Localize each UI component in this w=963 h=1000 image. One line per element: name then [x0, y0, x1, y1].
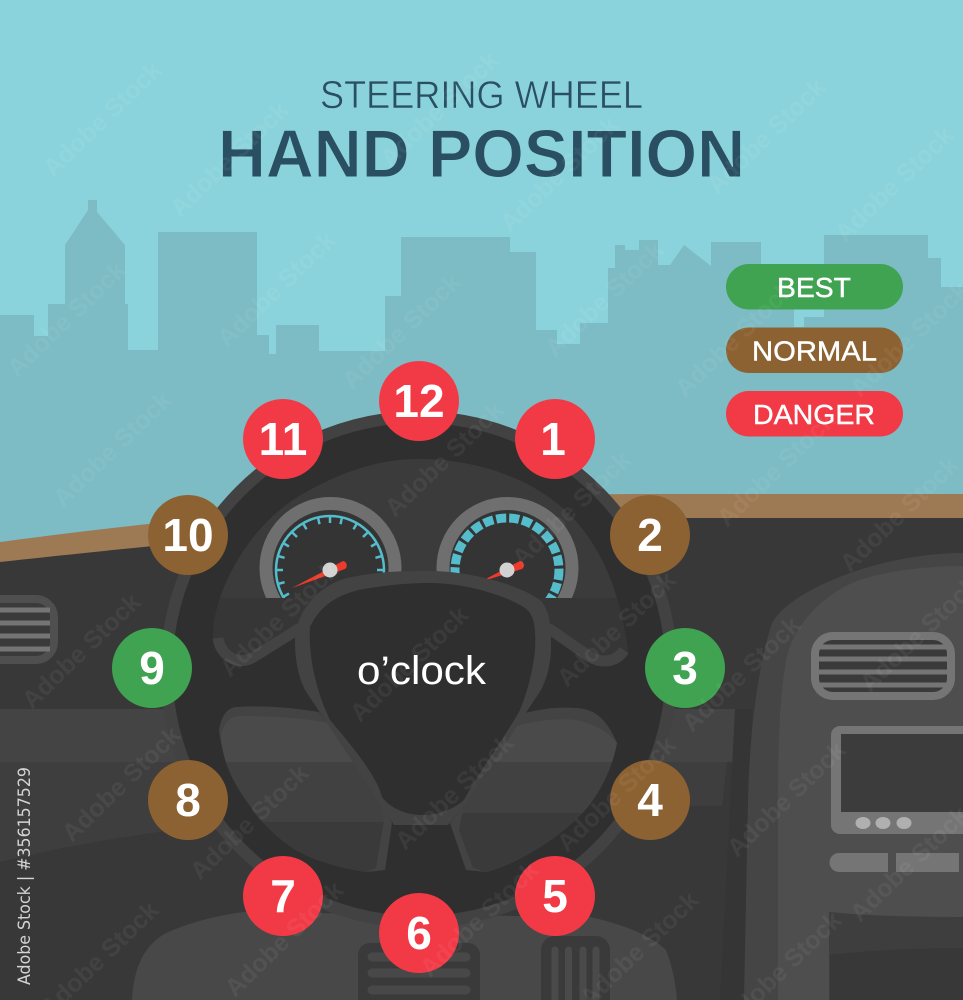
rpm needle [486, 561, 524, 580]
watermarks: Adobe Stock [670, 276, 799, 402]
legend: danger: DANGER [753, 399, 875, 430]
watermarks: Adobe Stock [57, 721, 186, 847]
marker 8 [148, 760, 228, 840]
stock id stamp: Adobe Stock | #356157529 [15, 767, 35, 985]
lower console pocket [830, 948, 963, 1000]
marker 3: 3 [672, 642, 698, 694]
watermarks: Adobe Stock [415, 856, 544, 982]
marker 5 [515, 856, 595, 936]
dashboard top trim [0, 494, 963, 600]
right air vent [815, 636, 951, 696]
watermarks: Adobe Stock [48, 386, 177, 512]
marker 6 [379, 893, 459, 973]
watermarks: Adobe Stock [722, 736, 851, 862]
title line 1: STEERING WHEEL [320, 74, 643, 117]
speed needle [292, 561, 347, 588]
watermarks: Adobe Stock [215, 556, 344, 682]
watermarks: Adobe Stock [165, 96, 294, 222]
watermarks: Adobe Stock [830, 121, 959, 247]
console inner [778, 566, 963, 1000]
wheel upper hub [213, 459, 628, 666]
label: o'clock: o’clock [357, 649, 487, 693]
watermarks: Adobe Stock [677, 611, 806, 737]
marker 8: 8 [175, 774, 201, 826]
steering wheel [166, 417, 672, 922]
marker 7 [243, 856, 323, 936]
marker 9: 9 [139, 642, 165, 694]
legend: best: BEST [777, 272, 851, 303]
watermarks: Adobe Stock [337, 268, 466, 394]
city skyline silhouette [0, 200, 963, 600]
screen buttons [856, 817, 912, 829]
marker 10: 10 [162, 509, 214, 561]
marker 3 [645, 628, 725, 708]
lower console cutout [829, 912, 963, 1000]
marker 2: 2 [637, 509, 663, 561]
watermarks: Adobe Stock [552, 566, 681, 692]
marker 11 [243, 399, 323, 479]
wheel rim [166, 417, 672, 922]
watermarks: Adobe Stock [540, 236, 669, 362]
legend: normal [726, 328, 903, 373]
watermarks: Adobe Stock [38, 56, 167, 182]
dashboard body [0, 518, 963, 1000]
display screen [831, 726, 963, 834]
marker 12: 12 [393, 375, 445, 427]
marker 4 [610, 760, 690, 840]
lower dash hump [132, 912, 677, 1000]
left air vent [0, 599, 54, 660]
watermarks: Adobe Stock [712, 406, 841, 532]
lower center vent [358, 943, 480, 1000]
marker 1 [515, 399, 595, 479]
console buttons [830, 853, 959, 872]
watermarks: Adobe Stock [212, 226, 341, 352]
watermarks: Adobe Stock [552, 731, 681, 857]
left gauge [260, 497, 402, 598]
marker 4: 4 [637, 774, 663, 826]
watermarks: Adobe Stock [380, 396, 509, 522]
right hub lobe [450, 708, 617, 872]
speed scale [274, 514, 386, 598]
watermarks: Adobe Stock [220, 876, 349, 1000]
watermarks: Adobe Stock [390, 729, 519, 855]
title [218, 74, 745, 192]
watermarks: Adobe Stock [507, 446, 636, 572]
watermarks: Adobe Stock [17, 588, 146, 714]
left hub lobe [219, 706, 392, 872]
marker 7: 7 [270, 870, 296, 922]
needle hub [322, 562, 338, 578]
watermarks: Adobe Stock [702, 73, 831, 199]
console outer [744, 553, 963, 1000]
title line 2: HAND POSITION [218, 116, 745, 192]
needle hub [500, 562, 514, 578]
center console [744, 553, 963, 1000]
watermarks: Adobe Stock [495, 111, 624, 237]
clock markers [112, 361, 725, 973]
legend: danger [726, 391, 903, 436]
watermarks: Adobe Stock [375, 46, 504, 172]
watermarks: Adobe Stock [2, 256, 131, 382]
legend: best [726, 264, 903, 310]
marker 11: 11 [259, 413, 307, 465]
marker 1: 1 [540, 413, 566, 465]
marker 2 [610, 495, 690, 575]
legend: normal: NORMAL [752, 336, 877, 366]
watermarks: Adobe Stock [835, 451, 963, 577]
watermarks: Adobe Stock [185, 759, 314, 885]
airbag center [295, 571, 551, 825]
watermarks: Adobe Stock [345, 601, 474, 727]
marker 9 [112, 628, 192, 708]
console shadow [720, 709, 752, 1000]
legend pills [726, 264, 903, 436]
right gauge [436, 497, 578, 598]
segmented scale [450, 514, 564, 598]
lower right vent [541, 936, 610, 1000]
marker 6: 6 [406, 907, 432, 959]
marker 10 [148, 495, 228, 575]
marker 5: 5 [542, 870, 568, 922]
dashboard light bands [0, 709, 736, 862]
marker 12 [379, 361, 459, 441]
